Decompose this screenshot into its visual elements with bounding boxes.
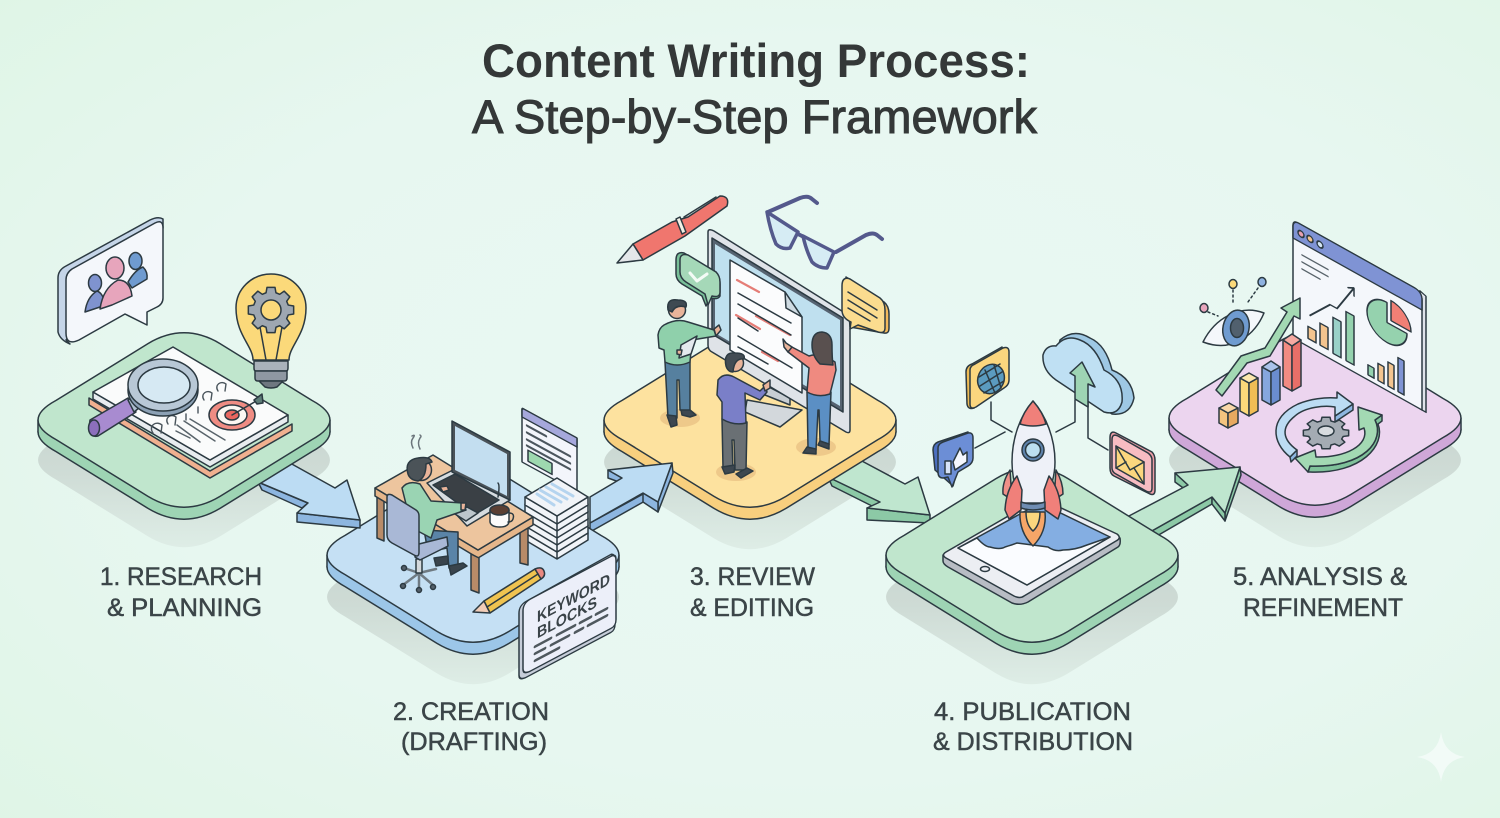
label: step 2: 2. CREATION [393, 698, 549, 726]
label: step 4 [933, 698, 1133, 756]
notebook [89, 347, 292, 478]
keyword blocks card: BLOCKS [537, 593, 597, 642]
glasses [767, 197, 882, 268]
panel: step 5 analysis and refinement [1169, 220, 1461, 517]
person at desk [402, 458, 467, 575]
floating document [522, 408, 577, 492]
label: step 3 [690, 563, 815, 622]
arrow: creation to review [590, 463, 673, 532]
platform: green [886, 468, 1178, 654]
label: step 1: & PLANNING [107, 594, 262, 622]
document on screen [730, 260, 802, 393]
label: step 5 [1233, 563, 1407, 622]
analytics dashboard [1293, 220, 1426, 412]
speech bubble with people [58, 218, 163, 344]
magnifying glass [88, 359, 198, 436]
panel: step 3 review and editing [604, 196, 896, 519]
eye [1200, 278, 1266, 348]
growth arrow [1216, 298, 1300, 396]
globe icon card [966, 347, 1009, 408]
refinement cycle [1276, 392, 1382, 472]
arrow: research to creation [258, 463, 360, 528]
rocket [1003, 401, 1063, 546]
label: step 3: 3. REVIEW [690, 563, 815, 591]
tablet [943, 499, 1120, 604]
label: step 4: & DISTRIBUTION [933, 728, 1133, 756]
keyword blocks card: KEYWORD [537, 570, 610, 626]
panel: step 4 publication and distribution [886, 333, 1178, 654]
platform shadows [38, 373, 1461, 684]
title: Content Writing Process: [482, 34, 1030, 87]
connector lines [975, 387, 1108, 450]
office chair [387, 494, 448, 592]
pen [617, 196, 728, 263]
person: man in green [658, 300, 721, 427]
paper stack [525, 478, 588, 559]
keyword blocks card [519, 552, 616, 681]
coffee mug [490, 483, 514, 527]
sparkle mark [1417, 732, 1465, 782]
arrow: review to publication [828, 460, 930, 523]
steam [412, 435, 421, 449]
step labels [100, 563, 1407, 756]
platform: green [38, 333, 330, 519]
panel: step 2 creation [327, 408, 619, 681]
label: step 2: (DRAFTING) [401, 728, 547, 756]
like icon card [933, 432, 973, 487]
green check bubble [676, 253, 720, 306]
label: step 5: REFINEMENT [1243, 594, 1403, 622]
label: step 3: & EDITING [690, 594, 814, 622]
person: woman in coral [783, 332, 836, 456]
pencil [473, 568, 545, 613]
yellow comment bubble [842, 277, 889, 333]
label: step 1: 1. RESEARCH [100, 563, 262, 591]
platform: purple [1169, 331, 1461, 517]
panel: step 1 research and planning [38, 218, 330, 519]
platform: blue [327, 468, 619, 654]
cloud upload [1043, 333, 1134, 414]
person: man in purple [716, 353, 770, 481]
3D bar chart [1219, 334, 1301, 428]
title [472, 34, 1037, 143]
monitor [708, 230, 850, 433]
desk [375, 455, 533, 593]
laptop [427, 421, 510, 526]
label: step 1 [100, 563, 262, 622]
label: step 5: 5. ANALYSIS & [1233, 563, 1407, 591]
light bulb with gear [236, 274, 306, 388]
arrow: publication to analysis [1127, 467, 1241, 540]
platform: yellow [604, 333, 896, 519]
label: step 2 [393, 698, 549, 756]
label: step 4: 4. PUBLICATION [934, 698, 1131, 726]
title: A Step-by-Step Framework [472, 90, 1037, 143]
mail icon card [1110, 432, 1155, 494]
